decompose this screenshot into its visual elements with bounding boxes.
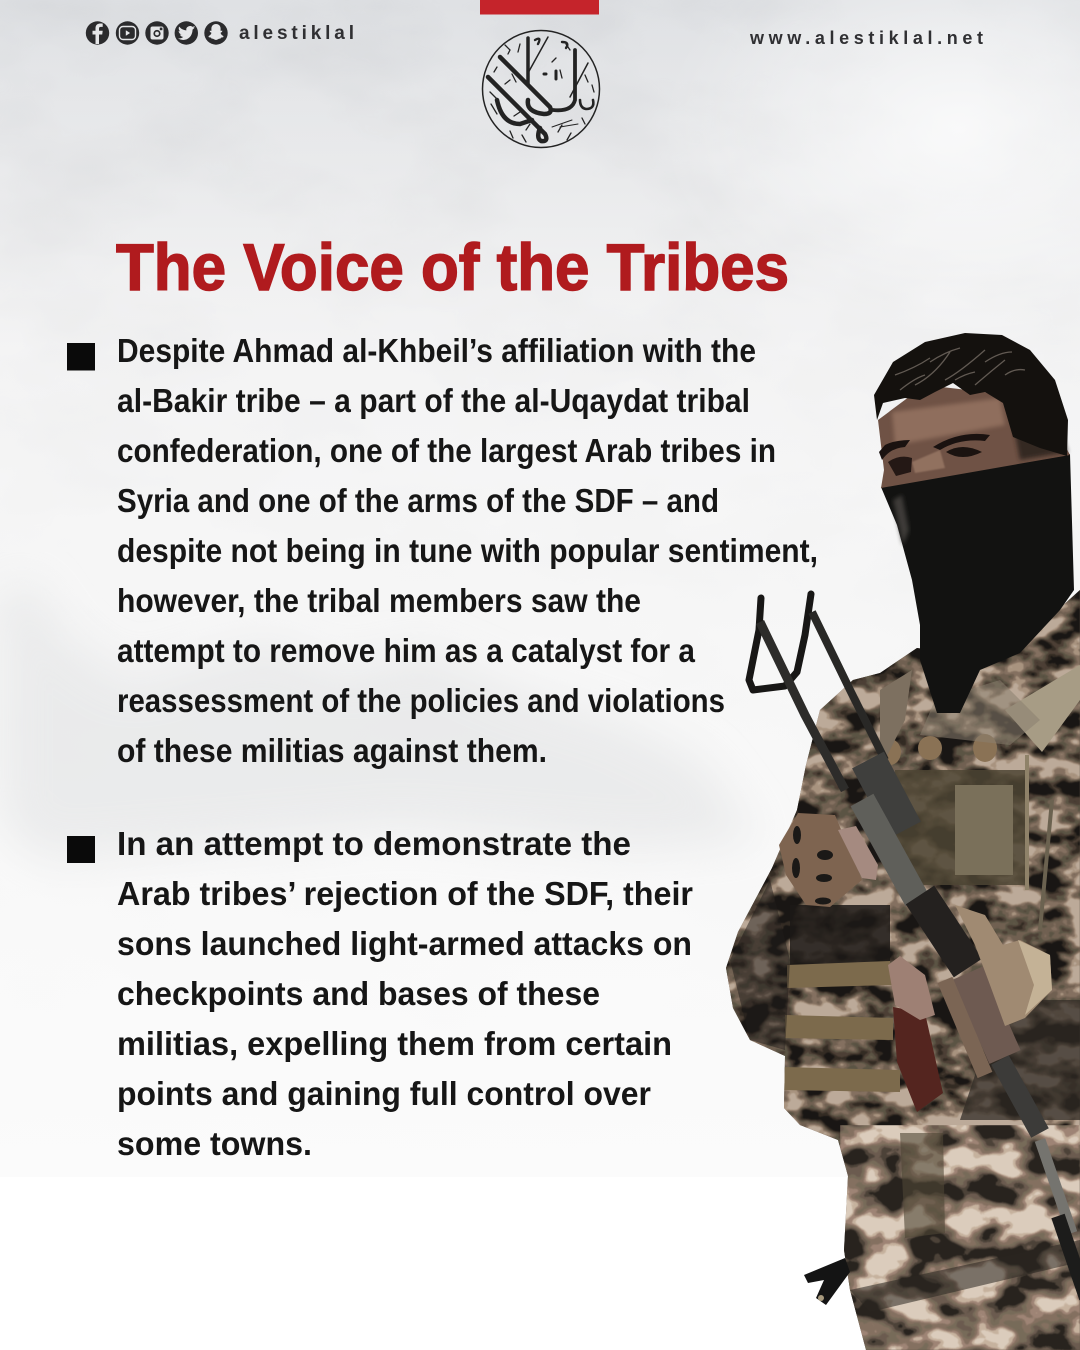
paragraph text: Despite Ahmad al-Khbeil’s affiliation with the xyxy=(117,332,756,369)
bipod sling xyxy=(749,594,811,690)
website url: www.alestiklal.net xyxy=(749,28,983,48)
handguard xyxy=(968,973,1005,1057)
title: The Voice of the Tribes xyxy=(116,230,789,304)
paragraph text xyxy=(117,332,818,769)
hair highlights xyxy=(895,348,1025,390)
magazine pouch straps xyxy=(782,961,900,1092)
dark undervest xyxy=(790,905,890,965)
bullet xyxy=(67,343,95,370)
paragraph text: despite not being in tune with popular sentiment, xyxy=(117,532,818,569)
muzzle section xyxy=(1000,1060,1040,1133)
belt shadow xyxy=(850,1240,1080,1312)
logo: round calligraphic emblem xyxy=(482,30,600,148)
paragraph text: In an attempt to demonstrate the xyxy=(117,825,631,862)
paragraph text: Syria and one of the arms of the SDF – and xyxy=(117,482,719,519)
paragraph text: attempt to remove him as a catalyst for a xyxy=(117,632,696,669)
tube xyxy=(862,800,917,900)
paragraph text: confederation, one of the largest Arab tribes in xyxy=(117,432,776,469)
paragraph text: Arab tribes’ rejection of the SDF, their xyxy=(117,875,693,912)
soldier photo illustration xyxy=(720,333,1080,1350)
right side shadow xyxy=(960,1000,1080,1120)
paragraph text: militias, expelling them from certain xyxy=(117,1025,672,1062)
handle: alestiklal xyxy=(239,23,354,44)
header: social media icons and handle xyxy=(86,21,354,45)
paragraph text: some towns. xyxy=(117,1125,312,1162)
sleeve shadow xyxy=(730,880,790,1050)
gas block xyxy=(868,760,905,830)
chest pouches xyxy=(895,755,1052,930)
icon: snapchat xyxy=(204,21,228,45)
paragraph text: of these militias against them. xyxy=(117,732,547,769)
mask and neck xyxy=(881,454,1074,713)
holster strap xyxy=(804,1258,850,1305)
paragraph text xyxy=(117,825,693,1162)
face shading xyxy=(892,398,1068,473)
front rods xyxy=(760,622,845,790)
paragraph 1 xyxy=(67,332,818,769)
pouch flaps knobs xyxy=(879,734,997,765)
paragraph text: checkpoints and bases of these xyxy=(117,975,600,1012)
paragraph text: sons launched light-armed attacks on xyxy=(117,925,692,962)
paragraph text: however, the tribal members saw the xyxy=(117,582,641,619)
bullet xyxy=(67,836,95,863)
icon: instagram xyxy=(145,21,169,45)
hair xyxy=(874,333,1068,456)
main rifle xyxy=(760,612,1080,1298)
mask highlight xyxy=(893,495,909,545)
icon: youtube xyxy=(116,21,139,45)
paragraph text: al-Bakir tribe – a part of the al-Uqaydat tribal xyxy=(117,382,750,419)
upper glove hand xyxy=(779,813,878,907)
body and camouflage uniform xyxy=(720,585,1080,1350)
paragraph text: points and gaining full control over xyxy=(117,1075,651,1112)
paragraph text: reassessment of the policies and violations xyxy=(117,682,725,719)
shirt placket xyxy=(900,1133,945,1238)
face xyxy=(878,385,1070,488)
eyes and brows xyxy=(879,434,990,476)
top red bar xyxy=(480,0,599,14)
magazine xyxy=(893,1007,943,1112)
icon: twitter xyxy=(175,21,198,45)
collar and shoulder straps xyxy=(1005,665,1080,752)
icon: facebook xyxy=(86,21,109,45)
receiver xyxy=(920,895,968,968)
lower glove hand xyxy=(888,905,1052,1026)
paragraph 2 xyxy=(67,825,693,1162)
